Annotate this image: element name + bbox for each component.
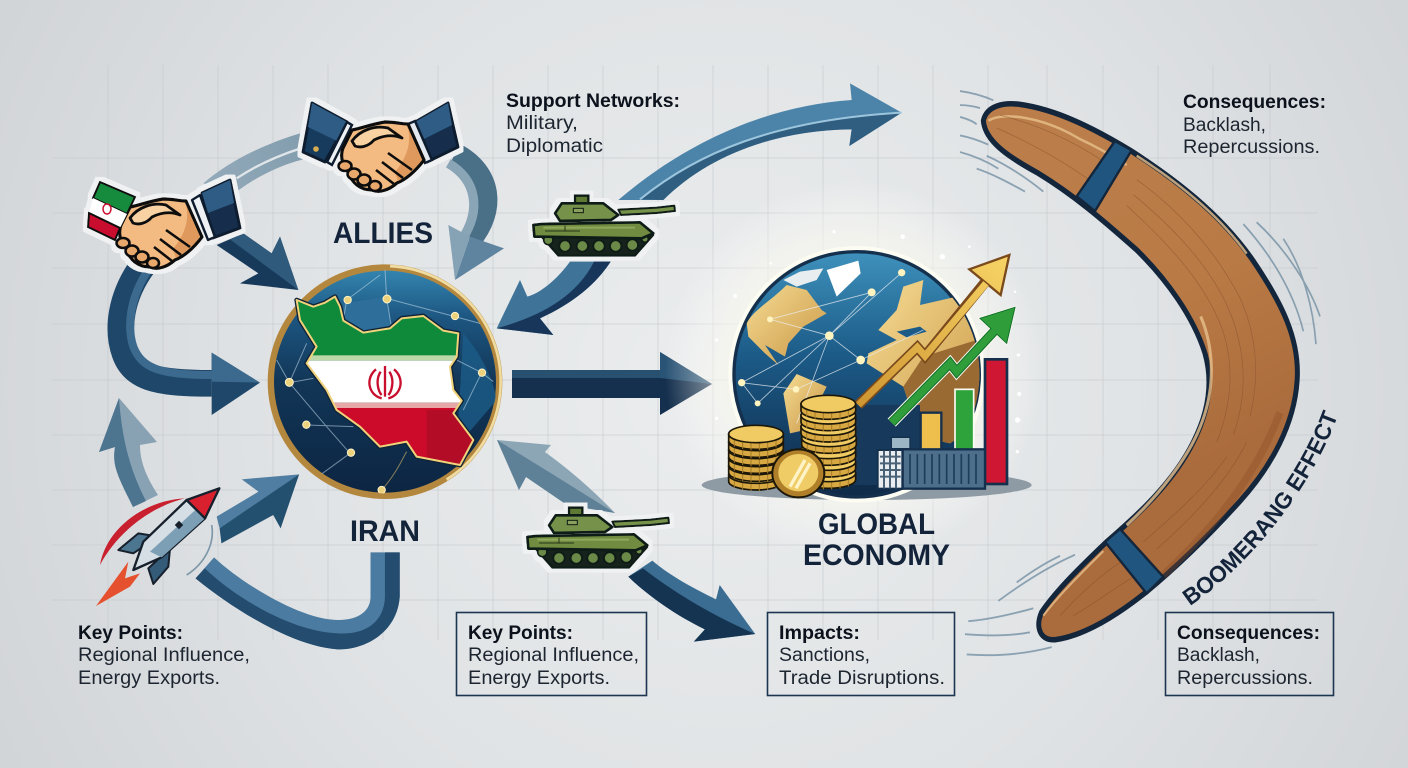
arrow: top tank back to Iran [497, 262, 611, 335]
text: consequences top: Consequences: [1183, 92, 1326, 113]
arrow: rocket to Iran [217, 474, 299, 543]
chart: bars [921, 359, 1007, 484]
sparkles [715, 230, 1021, 453]
arrow: lower tank to Iran [497, 440, 615, 513]
globe: Iran [268, 264, 502, 499]
arrow: left C curve to Iran [121, 265, 260, 415]
text: support networks [506, 91, 680, 157]
text: consequences top: Repercussions. [1183, 137, 1320, 158]
shadow ellipse [702, 470, 1032, 500]
panel: impacts box: Impacts: [779, 623, 860, 644]
arrow: green growth [892, 307, 1015, 423]
text: key points left [78, 623, 250, 689]
boomerang [983, 104, 1297, 640]
motion lines [960, 91, 1320, 655]
emblem [369, 366, 401, 398]
panel: impacts box: Sanctions, [779, 645, 870, 666]
icon: rocket [96, 488, 219, 606]
text: key points left: Key Points: [78, 623, 183, 644]
panel: key points box [456, 612, 646, 696]
icon: lower tank [527, 508, 669, 568]
panel: consequences box: Backlash, [1177, 645, 1260, 666]
map: Iran flag [294, 294, 476, 468]
icon: left handshake [88, 180, 240, 268]
title: GLOBAL ECONOMY [803, 508, 950, 572]
glow: global economy [665, 180, 1045, 560]
panel: impacts box: Trade Disruptions. [779, 668, 945, 689]
arrow: gold growth [858, 255, 1009, 405]
title: IRAN: IRAN [350, 515, 420, 548]
text: key points left: Energy Exports. [78, 668, 220, 689]
text: consequences top [1183, 92, 1326, 158]
coins: left stack [729, 425, 783, 491]
coins: right stack [801, 395, 856, 489]
panel: key points box: Key Points: [468, 623, 573, 644]
icon: top handshake [303, 103, 458, 191]
text: support networks: Support Networks: [506, 91, 680, 112]
globe: world [728, 246, 990, 503]
arrow: top arc to boomerang [618, 83, 902, 200]
wood grain [997, 115, 1256, 616]
icon: top tank [533, 196, 675, 256]
coin: front [772, 449, 824, 497]
text: support networks: Military, [506, 113, 578, 134]
arrow: Iran to global economy [512, 352, 712, 415]
text: support networks: Diplomatic [506, 136, 603, 157]
text: key points left: Regional Influence, [78, 645, 250, 666]
arrow: rocket upward [99, 398, 158, 507]
text: consequences top: Backlash, [1183, 115, 1266, 136]
title: GLOBAL ECONOMY: ECONOMY [803, 539, 950, 572]
panel: key points box: Energy Exports. [468, 668, 610, 689]
panel: key points box: Regional Influence, [468, 645, 639, 666]
panel: consequences box [1166, 612, 1334, 696]
arrow: top handshake to Iran [448, 154, 504, 280]
panel: consequences box: Repercussions. [1177, 668, 1313, 689]
arrow: left handshake to Iran [217, 233, 298, 290]
arrow: faded arc between handshakes [203, 133, 303, 192]
title: GLOBAL ECONOMY: GLOBAL [818, 508, 935, 541]
arrow: lower tank to impacts [628, 561, 755, 642]
panel: impacts box [768, 612, 954, 696]
container and building [878, 437, 985, 489]
bands [1077, 141, 1132, 211]
arrow: bottom loop [196, 552, 400, 649]
title: ALLIES: ALLIES [333, 217, 433, 250]
panel: consequences box: Consequences: [1177, 623, 1320, 644]
title: BOOMERANG EFFECT: BOOMERANG EFFECT [1182, 410, 1336, 606]
